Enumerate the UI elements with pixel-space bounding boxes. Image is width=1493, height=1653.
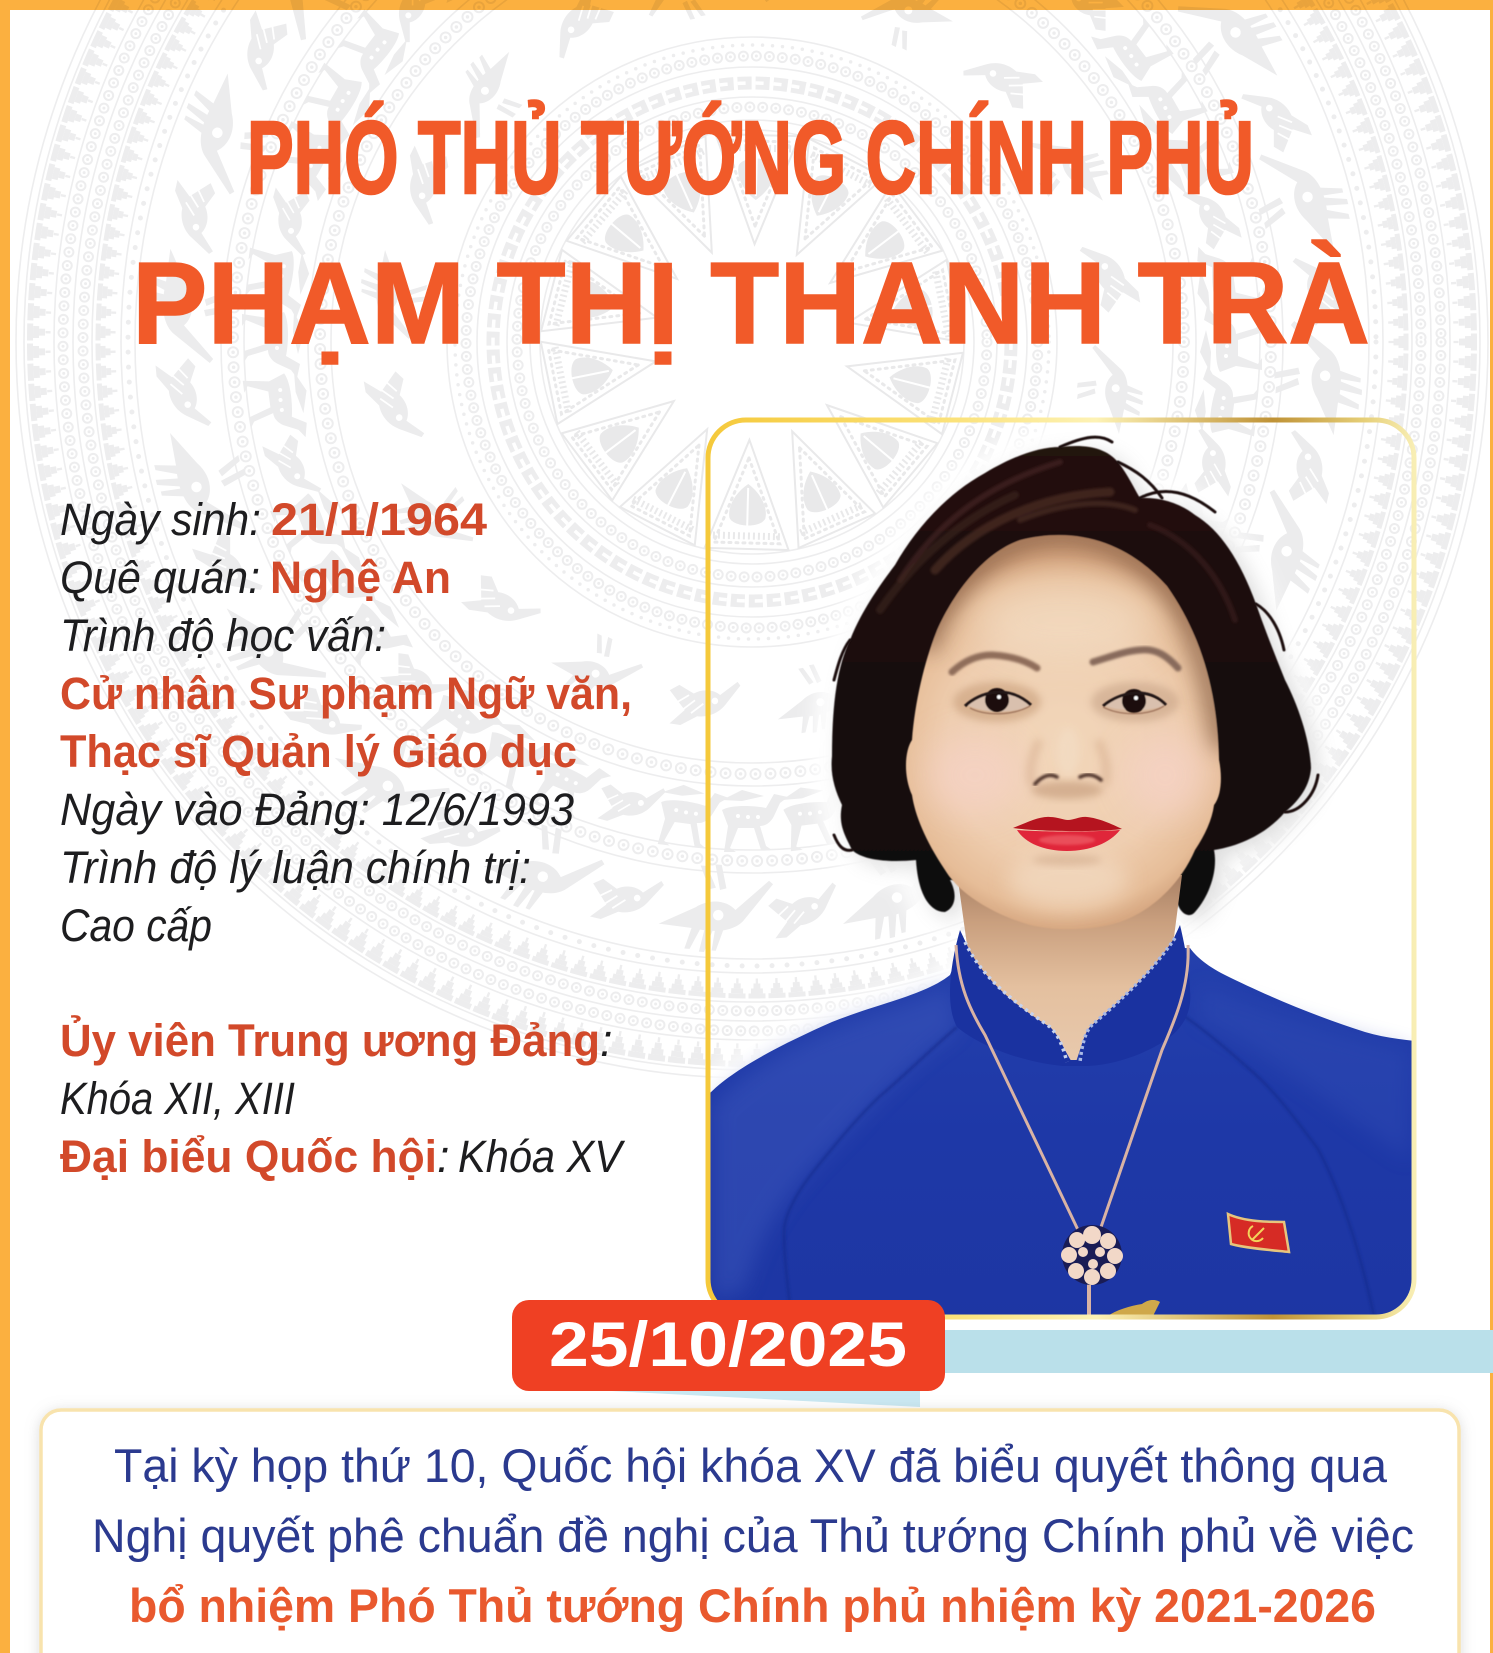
party entry date: Ngày vào Đảng: 12/6/1993	[60, 784, 574, 835]
left eye	[965, 688, 1031, 714]
national assembly line: :	[437, 1131, 450, 1182]
biography text block	[60, 494, 632, 1182]
hair	[832, 437, 1318, 915]
home town line	[60, 552, 451, 603]
face	[906, 535, 1222, 929]
soft shadow behind hair	[840, 452, 1319, 921]
eyebrows	[952, 650, 1178, 672]
nostrils	[1035, 775, 1101, 784]
ao dai dress	[700, 948, 1425, 1325]
photo frame	[708, 420, 1414, 1317]
title: name: PHẠM THỊ THANH TRÀ	[132, 238, 1370, 368]
soft white halo behind figure	[710, 430, 1329, 1078]
central committee line: :	[600, 1015, 613, 1066]
collar	[950, 925, 1190, 1066]
announcement line three: bổ nhiệm Phó Thủ tướng Chính phủ nhiệm kỳ 2021-2026	[129, 1579, 1376, 1632]
pendant	[1061, 1225, 1123, 1285]
background: bronze drum pattern	[16, 0, 1488, 1078]
hairline shading	[925, 535, 1222, 750]
birth date line	[60, 494, 487, 545]
national assembly line	[60, 1131, 626, 1182]
political theory label: Trình độ lý luận chính trị:	[60, 842, 531, 893]
portrait photo	[700, 420, 1425, 1325]
eye sockets	[953, 682, 1041, 722]
political theory value: Cao cấp	[60, 900, 212, 951]
chin shadow	[1032, 854, 1102, 866]
lips	[1013, 817, 1122, 851]
home town line: Quê quán:	[60, 552, 260, 603]
central committee terms: Khóa XII, XIII	[60, 1073, 295, 1124]
neck	[958, 875, 1182, 1062]
education value line two: Thạc sĩ Quản lý Giáo dục	[60, 726, 577, 777]
pale blue ribbon	[940, 1330, 1493, 1373]
party flag pin	[1228, 1214, 1289, 1252]
birth date line: 21/1/1964	[271, 494, 487, 545]
national assembly line: Đại biểu Quốc hội	[60, 1131, 437, 1182]
education value line one: Cử nhân Sư phạm Ngữ văn,	[60, 668, 632, 719]
pale blue ribbon tail under date	[514, 1386, 920, 1407]
central committee line: Ủy viên Trung ương Đảng	[60, 1015, 600, 1066]
education label: Trình độ học vấn:	[60, 610, 386, 661]
cheek highlights	[927, 735, 1023, 815]
right eye	[1103, 689, 1166, 714]
announcement line two: Nghị quyết phê chuẩn đề nghị của Thủ tướng Chính phủ về việc	[92, 1509, 1414, 1562]
announcement line one: Tại kỳ họp thứ 10, Quốc hội khóa XV đã biểu quyết thông qua	[114, 1439, 1388, 1492]
nose shading	[1030, 740, 1106, 785]
home town line: Nghệ An	[270, 552, 451, 603]
gold brooch	[1110, 1300, 1160, 1314]
date text: 25/10/2025	[549, 1310, 907, 1380]
national assembly line: Khóa XV	[458, 1131, 626, 1182]
panel: announcement	[41, 1410, 1459, 1653]
date badge	[512, 1300, 945, 1391]
birth date line: Ngày sinh:	[60, 494, 261, 545]
necklace	[956, 945, 1188, 1318]
